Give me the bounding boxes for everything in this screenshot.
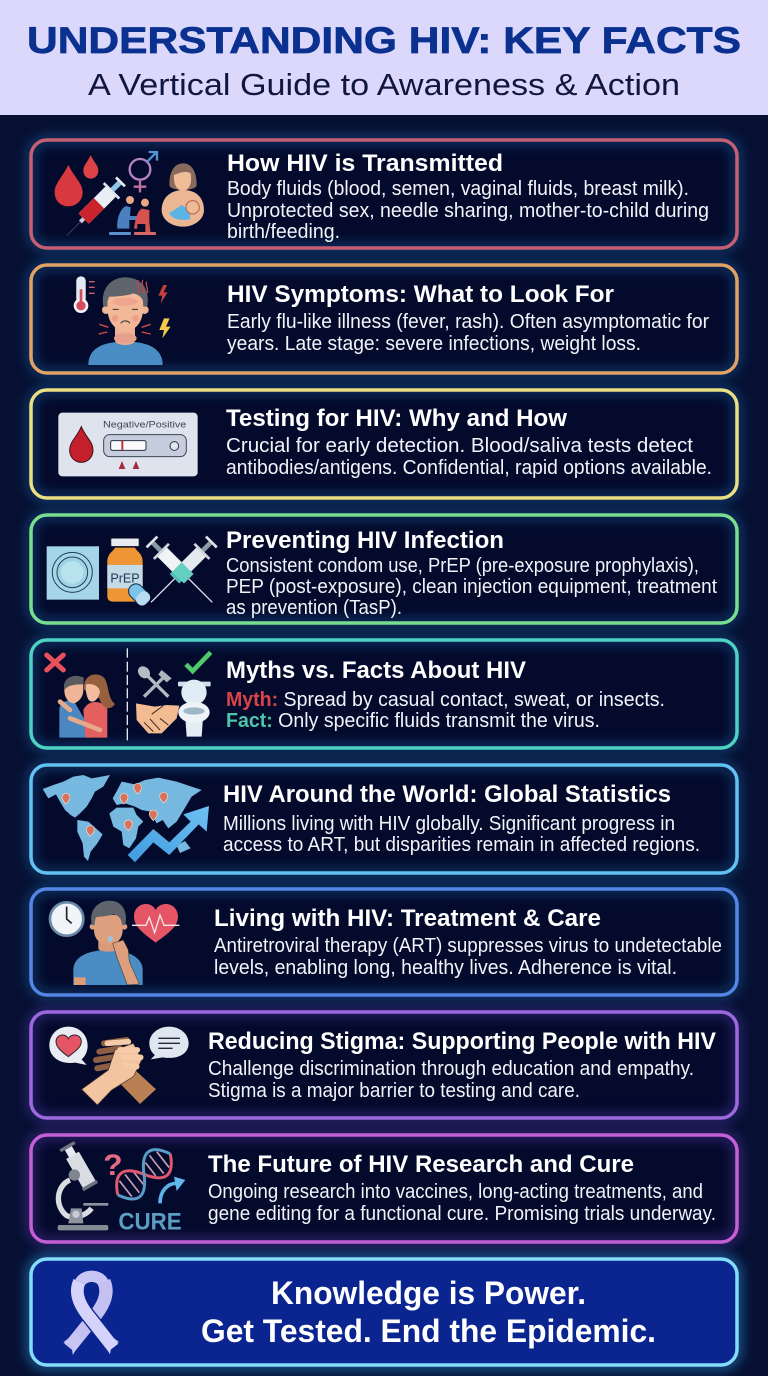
heading: Living with HIV: Treatment & Care xyxy=(214,905,601,932)
heading: Myths vs. Facts About HIV xyxy=(226,657,527,684)
callout text: Knowledge is Power. xyxy=(271,1275,586,1311)
body text: Myth: Spread by casual contact, sweat, or insects. xyxy=(226,688,665,711)
body text: Millions living with HIV globally. Significant progress in xyxy=(223,812,675,835)
panel: call to action xyxy=(31,1259,737,1365)
body text: Ongoing research into vaccines, long-acting treatments, and xyxy=(208,1180,703,1203)
body text: antibodies/antigens. Confidential, rapid options available. xyxy=(226,456,712,479)
callout text: Get Tested. End the Epidemic. xyxy=(201,1313,656,1349)
body text: Consistent condom use, PrEP (pre-exposure prophylaxis), xyxy=(226,554,699,577)
body text: Fact: Only specific fluids transmit the virus. xyxy=(226,709,600,732)
body text: Stigma is a major barrier to testing and care. xyxy=(208,1079,580,1102)
body text xyxy=(208,1180,716,1225)
body text: as prevention (TasP). xyxy=(226,596,402,619)
body text: PEP (post-exposure), clean injection equipment, treatment xyxy=(226,575,717,598)
body text xyxy=(226,688,665,732)
heading: Preventing HIV Infection xyxy=(226,527,504,554)
panel: myths vs facts xyxy=(31,640,737,748)
body text xyxy=(227,177,709,243)
icon: myth and fact comparison xyxy=(47,648,211,740)
body text xyxy=(227,310,709,355)
body text xyxy=(214,934,722,979)
icon: awareness ribbon xyxy=(63,1276,119,1355)
panel: reducing stigma xyxy=(31,1012,737,1118)
body text: years. Late stage: severe infections, weight loss. xyxy=(227,332,641,355)
body text xyxy=(226,554,717,619)
heading: HIV Around the World: Global Statistics xyxy=(223,781,671,808)
icon: transmission routes xyxy=(55,152,204,243)
callout text xyxy=(201,1275,656,1349)
panel: symptoms xyxy=(31,265,737,373)
header band xyxy=(0,0,768,115)
panel: testing xyxy=(31,390,737,498)
panel: global statistics xyxy=(31,765,737,873)
body text: Antiretroviral therapy (ART) suppresses virus to undetectable xyxy=(214,934,722,957)
title: UNDERSTANDING HIV: KEY FACTS xyxy=(27,19,741,61)
icon: clock, person taking pill, heart xyxy=(50,901,179,985)
body text: levels, enabling long, healthy lives. Adherence is vital. xyxy=(214,956,677,979)
heading: The Future of HIV Research and Cure xyxy=(208,1151,634,1178)
body text: Unprotected sex, needle sharing, mother-to-child during xyxy=(227,199,709,222)
body text: access to ART, but disparities remain in affected regions. xyxy=(223,833,700,856)
body text: birth/feeding. xyxy=(227,220,340,243)
panel: how HIV is transmitted xyxy=(31,140,737,248)
icon: person with symptoms xyxy=(74,277,171,365)
icon: world map with rising arrow xyxy=(43,775,209,862)
body text: Body fluids (blood, semen, vaginal fluids, breast milk). xyxy=(227,177,689,200)
icon: microscope, DNA, CURE: ? xyxy=(103,1149,123,1182)
icon: rapid test kit xyxy=(58,413,198,476)
panel: prevention xyxy=(31,515,737,623)
body text: Crucial for early detection. Blood/saliva tests detect xyxy=(226,434,693,457)
icon: condom, PrEP bottle, syringes: PrEP xyxy=(110,570,140,585)
icon: microscope, DNA, CURE xyxy=(58,1141,185,1235)
heading: HIV Symptoms: What to Look For xyxy=(227,281,614,308)
body text: Challenge discrimination through education and empathy. xyxy=(208,1057,694,1080)
icon: clasped hands and speech bubbles xyxy=(49,1027,189,1105)
icon: microscope, DNA, CURE: CURE xyxy=(118,1208,182,1235)
body text xyxy=(223,812,700,856)
heading: Reducing Stigma: Supporting People with HIV xyxy=(208,1028,717,1055)
body text: Early flu-like illness (fever, rash). Often asymptomatic for xyxy=(227,310,709,333)
icon: condom, PrEP bottle, syringes xyxy=(47,533,220,610)
body text: gene editing for a functional cure. Promising trials underway. xyxy=(208,1202,716,1225)
body text xyxy=(208,1057,694,1102)
heading: Testing for HIV: Why and How xyxy=(226,405,568,432)
heading: How HIV is Transmitted xyxy=(227,150,503,177)
body text xyxy=(226,434,712,479)
subtitle: A Vertical Guide to Awareness & Action xyxy=(88,67,680,102)
panel: future research and cure xyxy=(31,1135,737,1242)
icon: rapid test kit: Negative/Positive xyxy=(103,420,186,430)
panel: treatment and care xyxy=(31,889,737,995)
